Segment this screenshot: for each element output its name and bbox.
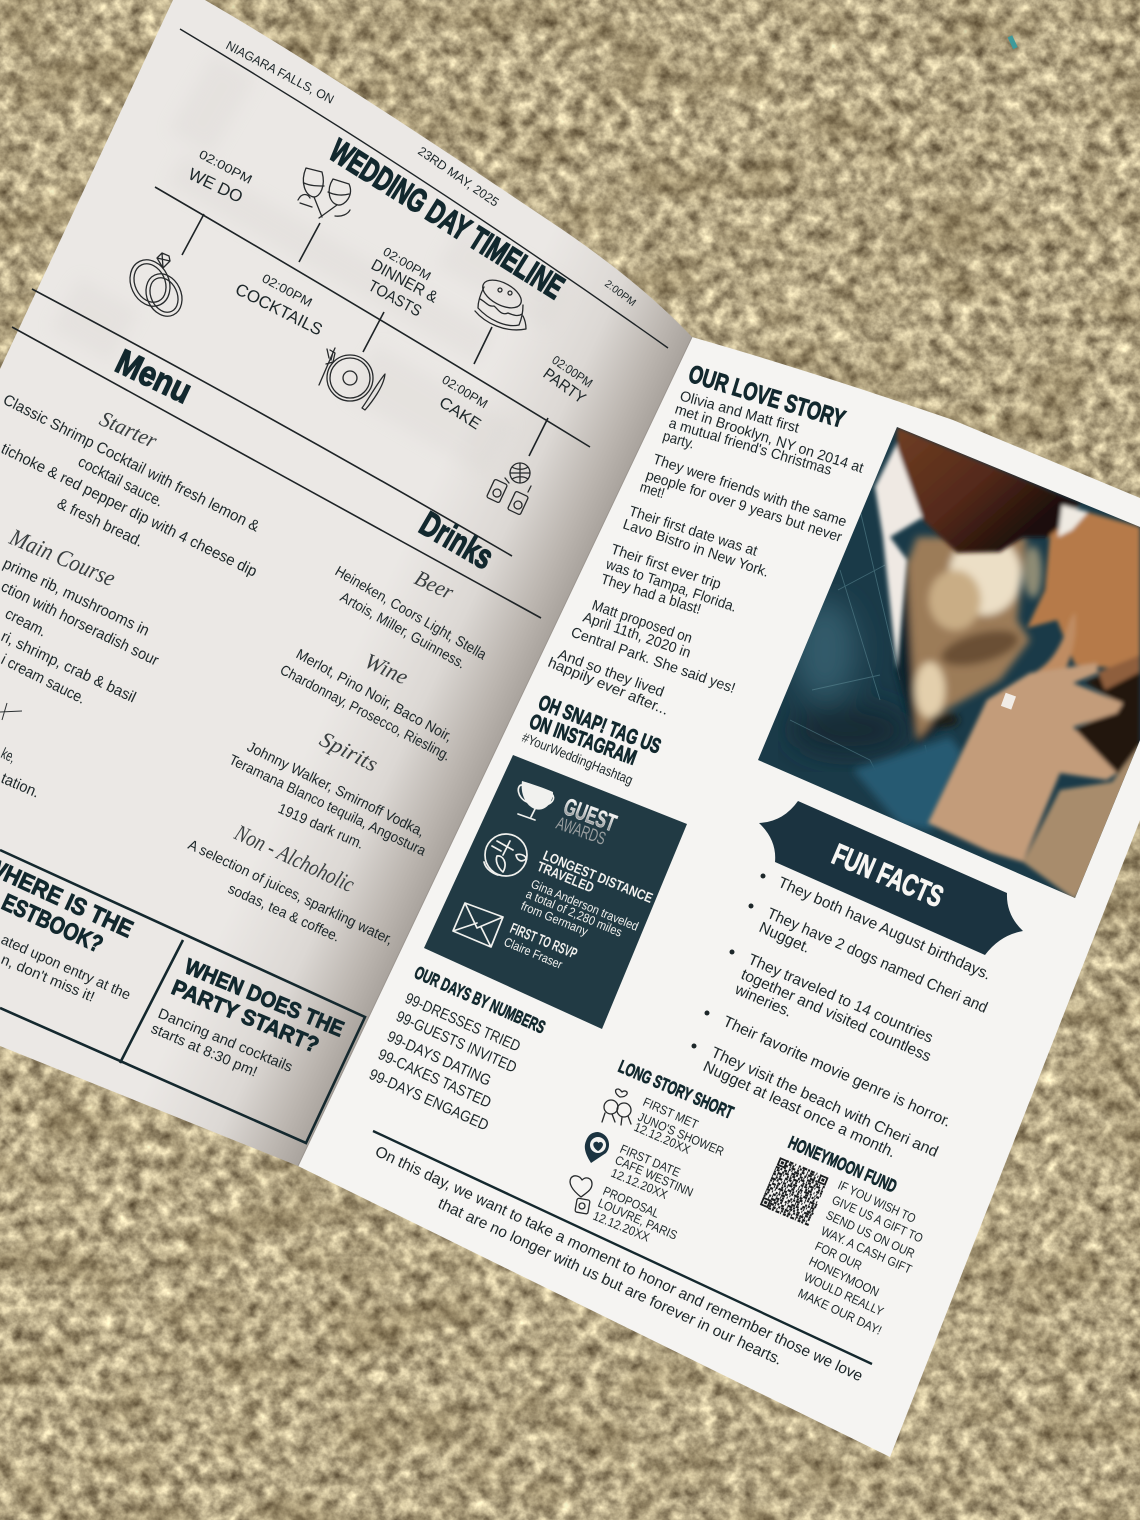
step: dinner and toasts: TOASTS xyxy=(365,278,424,320)
heading: guest awards: AWARDS xyxy=(554,813,608,849)
callout: party start: PARTY START? xyxy=(168,975,323,1058)
story paragraph 4: They had a blast! xyxy=(599,572,703,618)
script heading: dessert fragment xyxy=(0,703,22,720)
callout: guestbook: n, don't miss it! xyxy=(0,952,97,1006)
starter items: tichoke & red pepper dip with 4 cheese dip xyxy=(0,440,260,581)
photo: couple embracing xyxy=(750,420,1140,910)
heading: days by numbers: OUR DAYS BY NUMBERS xyxy=(411,962,548,1038)
award: longest distance: LONGEST DISTANCE xyxy=(541,847,655,906)
honeymoon text: FOR OUR xyxy=(813,1239,864,1273)
beer list: Artois, Miller, Guinness. xyxy=(337,590,468,672)
step: cake: CAKE xyxy=(436,394,484,433)
callout: guestbook xyxy=(0,852,137,1006)
non-alcoholic list: A selection of juices, sparkling water, xyxy=(185,837,395,948)
callout: party start xyxy=(148,954,348,1081)
step: cake xyxy=(436,373,490,433)
icon: map pin heart xyxy=(585,1132,609,1163)
step: cake: 02:00PM xyxy=(439,373,490,411)
icon: cake xyxy=(475,274,526,330)
milestone: proposal: PROPOSAL xyxy=(601,1184,661,1221)
award: longest distance: a total of 2,280 miles xyxy=(524,887,624,940)
story paragraph 4: was to Tampa, Florida. xyxy=(603,556,739,616)
icon: dj speakers and disco ball xyxy=(486,463,531,515)
panel: our days by numbers xyxy=(366,962,548,1135)
main course items: i cream sauce. xyxy=(0,651,88,708)
heading: oh snap: ON INSTAGRAM xyxy=(526,710,639,770)
spirits list: Johnny Walker, Smirnoff Vodka, xyxy=(244,739,427,840)
hashtag: #YourWeddingHashtag xyxy=(520,730,635,788)
step: dinner and toasts: DINNER & xyxy=(368,257,441,307)
honeymoon text: MAKE OUR DAY! xyxy=(796,1286,884,1338)
panel: menu xyxy=(0,342,263,802)
bullet list xyxy=(692,874,993,1161)
script heading: wine: Wine xyxy=(361,648,412,690)
venue: NIAGARA FALLS, ON xyxy=(224,38,336,107)
jacket check lines xyxy=(790,513,926,767)
heading: honeymoon fund: HONEYMOON FUND xyxy=(785,1132,900,1197)
heading: oh snap xyxy=(526,691,664,770)
bullet list: They have 2 dogs named Cheri and xyxy=(764,905,990,1017)
award: first to rsvp: FIRST TO RSVP xyxy=(507,920,580,963)
step: dinner and toasts: 02:00PM xyxy=(380,245,433,283)
icon: two friends with heart xyxy=(602,1089,631,1125)
icon: clinking glasses xyxy=(298,168,350,218)
heading: our love story: OUR LOVE STORY xyxy=(685,360,849,434)
milestone: first met: 12.12.20XX xyxy=(632,1120,693,1157)
banner label: FUN FACTS xyxy=(827,838,948,914)
heading: menu: Menu xyxy=(110,342,198,411)
heading: oh snap: OH SNAP! TAG US xyxy=(535,691,664,758)
script heading: non-alcoholic: Non - Alchoholic xyxy=(230,820,358,897)
spirits list: Teramana Blanco tequila, Angostura xyxy=(226,752,429,860)
number list xyxy=(366,990,523,1135)
bullet list: They both have August birthdays. xyxy=(775,874,993,984)
honeymoon text: SEND US ON OUR xyxy=(824,1208,917,1261)
main course items: ction with horseradish sour xyxy=(0,578,161,669)
heading: drinks: Drinks xyxy=(413,504,500,577)
panel: left page xyxy=(0,0,692,1166)
header rule xyxy=(180,29,668,348)
panel: fun facts xyxy=(692,801,1023,1161)
honeymoon text: IF YOU WISH TO xyxy=(836,1178,918,1226)
panel: guest awards xyxy=(424,755,687,1029)
date: 23RD MAY, 2025 xyxy=(415,144,501,210)
number list: 99-GUESTS INVITED xyxy=(393,1008,519,1077)
spirits list: 1919 dark rum. xyxy=(275,801,366,853)
panel: honeymoon fund xyxy=(760,1132,925,1338)
milestone: proposal: 12.12.20XX xyxy=(591,1209,652,1245)
step: we do: 02:00PM xyxy=(197,147,254,187)
panel: info boxes xyxy=(0,850,365,1143)
story paragraph 4: Their first ever trip xyxy=(609,542,723,593)
step: party: PARTY xyxy=(540,365,589,408)
script heading: spirits: Spirits xyxy=(316,726,382,777)
main course items: prime rib, mushrooms in xyxy=(0,555,152,640)
bullet list: wineries. xyxy=(731,981,794,1021)
award: longest distance: from Germany xyxy=(519,899,590,939)
callout: party start: Dancing and cocktails xyxy=(155,1006,295,1076)
bullet list: Their favorite movie genre is horror. xyxy=(720,1013,953,1131)
step: dinner and toasts xyxy=(365,245,441,320)
panel: remembrance note: that are no longer with us but are forever in our hearts. xyxy=(435,1195,785,1369)
timeline chart xyxy=(123,147,595,515)
dessert items xyxy=(0,745,42,802)
honeymoon text: GIVE US A GIFT TO xyxy=(830,1193,925,1246)
panel: instagram tag xyxy=(520,691,664,788)
panel: long story short xyxy=(570,1056,736,1245)
wine list: Chardonnay, Prosecco, Riesling. xyxy=(277,662,453,765)
story paragraph 2: met! xyxy=(638,480,666,502)
milestone: first met: FIRST MET xyxy=(641,1095,701,1132)
panel: remembrance note: On this day, we want to take a moment to honor and remember those we love xyxy=(372,1143,865,1385)
story paragraph 5: Matt proposed on xyxy=(590,598,694,647)
milestone: first date: 12.12.20XX xyxy=(609,1166,670,1202)
story paragraph 2: people for over 9 years but never xyxy=(644,468,844,546)
icon: plate and cutlery xyxy=(319,348,385,410)
icon: rings xyxy=(123,253,189,322)
heading: guest awards xyxy=(554,793,620,849)
script heading: main course: Main Course xyxy=(5,524,119,592)
panel: our love story xyxy=(545,360,865,719)
icon: envelope xyxy=(453,903,503,947)
step: cocktails: 02:00PM xyxy=(260,271,315,310)
bullet list: together and visited countless xyxy=(738,966,934,1066)
number list: 99-DAYS DATING xyxy=(384,1028,493,1090)
number list: 99-CAKES TASTED xyxy=(375,1046,494,1112)
story paragraph 1: a mutual friend's Christmas xyxy=(667,415,833,479)
step: cocktails: COCKTAILS xyxy=(232,280,326,339)
qr code xyxy=(760,1158,828,1225)
award: longest distance: Gina Anderson traveled xyxy=(529,877,640,934)
number list: 99-DRESSES TRIED xyxy=(402,990,523,1056)
starter items: cocktail sauce. xyxy=(75,453,166,511)
honeymoon text: WOULD REALLY xyxy=(802,1270,886,1319)
divider rules xyxy=(12,289,541,618)
milestone: first met: JUNO'S SHOWER xyxy=(636,1110,726,1159)
bullet list: Nugget at least once a month. xyxy=(700,1058,898,1161)
callout: party start: WHEN DOES THE xyxy=(181,954,348,1042)
story paragraph 6: happily ever after... xyxy=(545,655,671,719)
story paragraph 1: met in Brooklyn, NY on 2014 at xyxy=(673,402,865,477)
milestone: first met xyxy=(632,1095,726,1159)
icon: heart balloon gift xyxy=(570,1176,592,1214)
award: first to rsvp xyxy=(502,920,580,972)
story paragraph 1: Olivia and Matt first xyxy=(678,388,801,437)
milestone: first date xyxy=(609,1142,695,1202)
story paragraph 6: And so they lived xyxy=(556,647,666,701)
milestone: first date: CAFE WESTINN xyxy=(613,1153,695,1200)
story paragraph 2: They were friends with the same xyxy=(651,452,849,531)
number list: 99-DAYS ENGAGED xyxy=(366,1066,491,1135)
story paragraph 3: Their first date was at xyxy=(627,504,759,560)
starter items: & fresh bread. xyxy=(54,495,146,551)
icon: trophy xyxy=(518,781,554,820)
banner xyxy=(759,801,1023,955)
panel: drinks xyxy=(185,504,500,948)
honeymoon text xyxy=(796,1178,925,1338)
bullet list: They traveled to 14 countries xyxy=(745,951,936,1047)
non-alcoholic list: sodas, tea & coffee. xyxy=(225,881,342,946)
step: party: 02:00PM xyxy=(549,353,595,390)
callout: guestbook: ated upon entry at the xyxy=(0,932,133,1004)
story paragraph 1: party. xyxy=(661,428,696,453)
milestone: first date: FIRST DATE xyxy=(618,1142,682,1180)
award: longest distance xyxy=(519,847,655,940)
honeymoon text: HONEYMOON xyxy=(807,1254,881,1300)
honeymoon text: WAY. A CASH GIFT xyxy=(819,1224,914,1277)
callout: party start: starts at 8:30 pm! xyxy=(148,1021,260,1081)
heading: guest awards: GUEST xyxy=(560,793,620,838)
title: wedding day timeline: WEDDING DAY TIMELINE xyxy=(323,132,571,306)
story paragraph 3: Lavo Bistro in New York. xyxy=(621,517,771,581)
step: we do xyxy=(185,147,254,207)
callout: guestbook: ESTBOOK? xyxy=(0,889,107,959)
time: 2:00PM xyxy=(602,278,638,309)
beer list: Heineken, Coors Light, Stella xyxy=(332,564,490,664)
bullet list: They visit the beach with Cheri and xyxy=(708,1044,941,1161)
script heading: beer: Beer xyxy=(411,565,458,605)
main course items xyxy=(0,555,161,708)
story paragraph 5: Central Park. She said yes! xyxy=(569,625,737,697)
main course items: cream. xyxy=(2,605,49,641)
milestone: proposal: LOUVRE, PARIS xyxy=(596,1196,679,1243)
heading: long story short: LONG STORY SHORT xyxy=(615,1056,736,1123)
wine list: Merlot, Pino Noir, Baco Noir, xyxy=(293,646,455,746)
award: longest distance: TRAVELED xyxy=(535,858,596,896)
milestone: proposal xyxy=(591,1184,679,1245)
bullet list: Nugget. xyxy=(756,919,813,957)
story paragraph 5: April 11th, 2020 in xyxy=(581,610,693,662)
starter items: Classic Shrimp Cocktail with fresh lemon & xyxy=(0,391,263,536)
step: we do: WE DO xyxy=(185,164,246,207)
main course items: ri, shrimp, crab & basil xyxy=(0,628,138,706)
icon: globe and plane xyxy=(484,834,527,876)
award: first to rsvp: Claire Fraser xyxy=(502,935,564,972)
panel: right page xyxy=(298,337,1140,1457)
script heading: starter: Starter xyxy=(96,406,161,453)
step: party xyxy=(540,353,595,408)
